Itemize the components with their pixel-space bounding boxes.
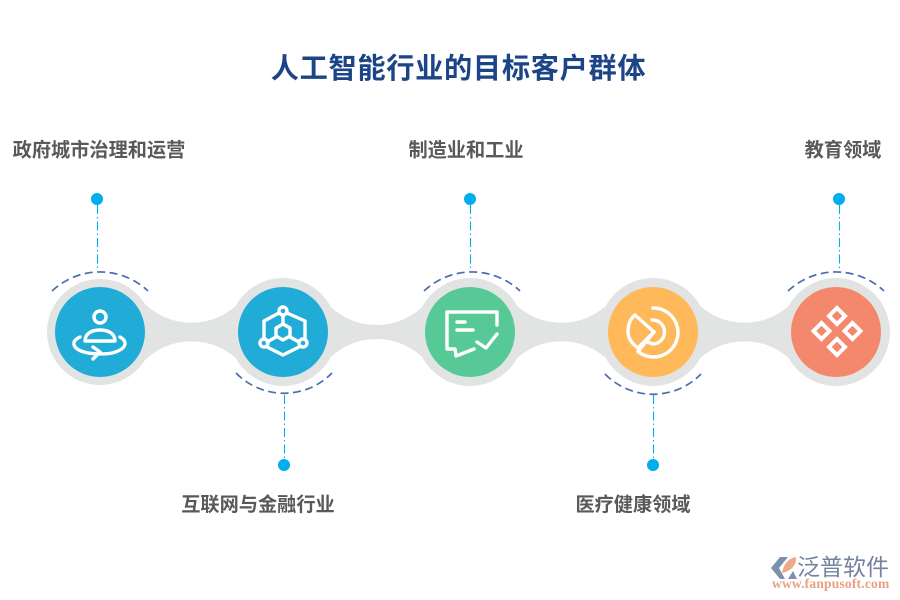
leader 5 xyxy=(833,193,845,270)
leader 1 xyxy=(91,193,103,270)
label: healthcare: 医疗健康领域 xyxy=(575,493,691,516)
icon: message with check xyxy=(447,312,497,356)
arc: node 2 xyxy=(236,373,332,393)
label: education: 教育领域 xyxy=(805,138,881,162)
label: internet and finance: 互联网与金融行业 xyxy=(181,493,335,516)
icon: segmented circle xyxy=(628,308,678,357)
leader 3 xyxy=(464,193,476,270)
icon: four diamonds xyxy=(814,308,860,355)
title: 人工智能行业的目标客户群体 xyxy=(271,52,646,84)
leader 2 xyxy=(278,395,290,471)
icon: person with orbit xyxy=(74,311,125,359)
arc: node 3 xyxy=(424,272,520,291)
arc: node 5 xyxy=(788,272,884,291)
node 3: manufacturing xyxy=(425,287,515,377)
arc: node 1 xyxy=(52,272,148,291)
logo xyxy=(771,554,890,591)
node 5: education xyxy=(791,287,881,377)
logo name: 泛普软件 xyxy=(797,554,889,580)
arc: node 4 xyxy=(605,374,701,394)
leader 4 xyxy=(647,395,659,471)
logo url: www.fanpusoft.com xyxy=(772,576,890,591)
logo mark xyxy=(771,557,797,579)
node 2: internet and finance xyxy=(238,287,328,377)
node 1: government xyxy=(55,287,145,377)
label: government: 政府城市治理和运营 xyxy=(13,138,185,162)
icon: hexagon network xyxy=(260,307,307,355)
label: manufacturing: 制造业和工业 xyxy=(408,140,524,162)
node 4: healthcare xyxy=(608,287,698,377)
connected gray track xyxy=(47,278,890,386)
